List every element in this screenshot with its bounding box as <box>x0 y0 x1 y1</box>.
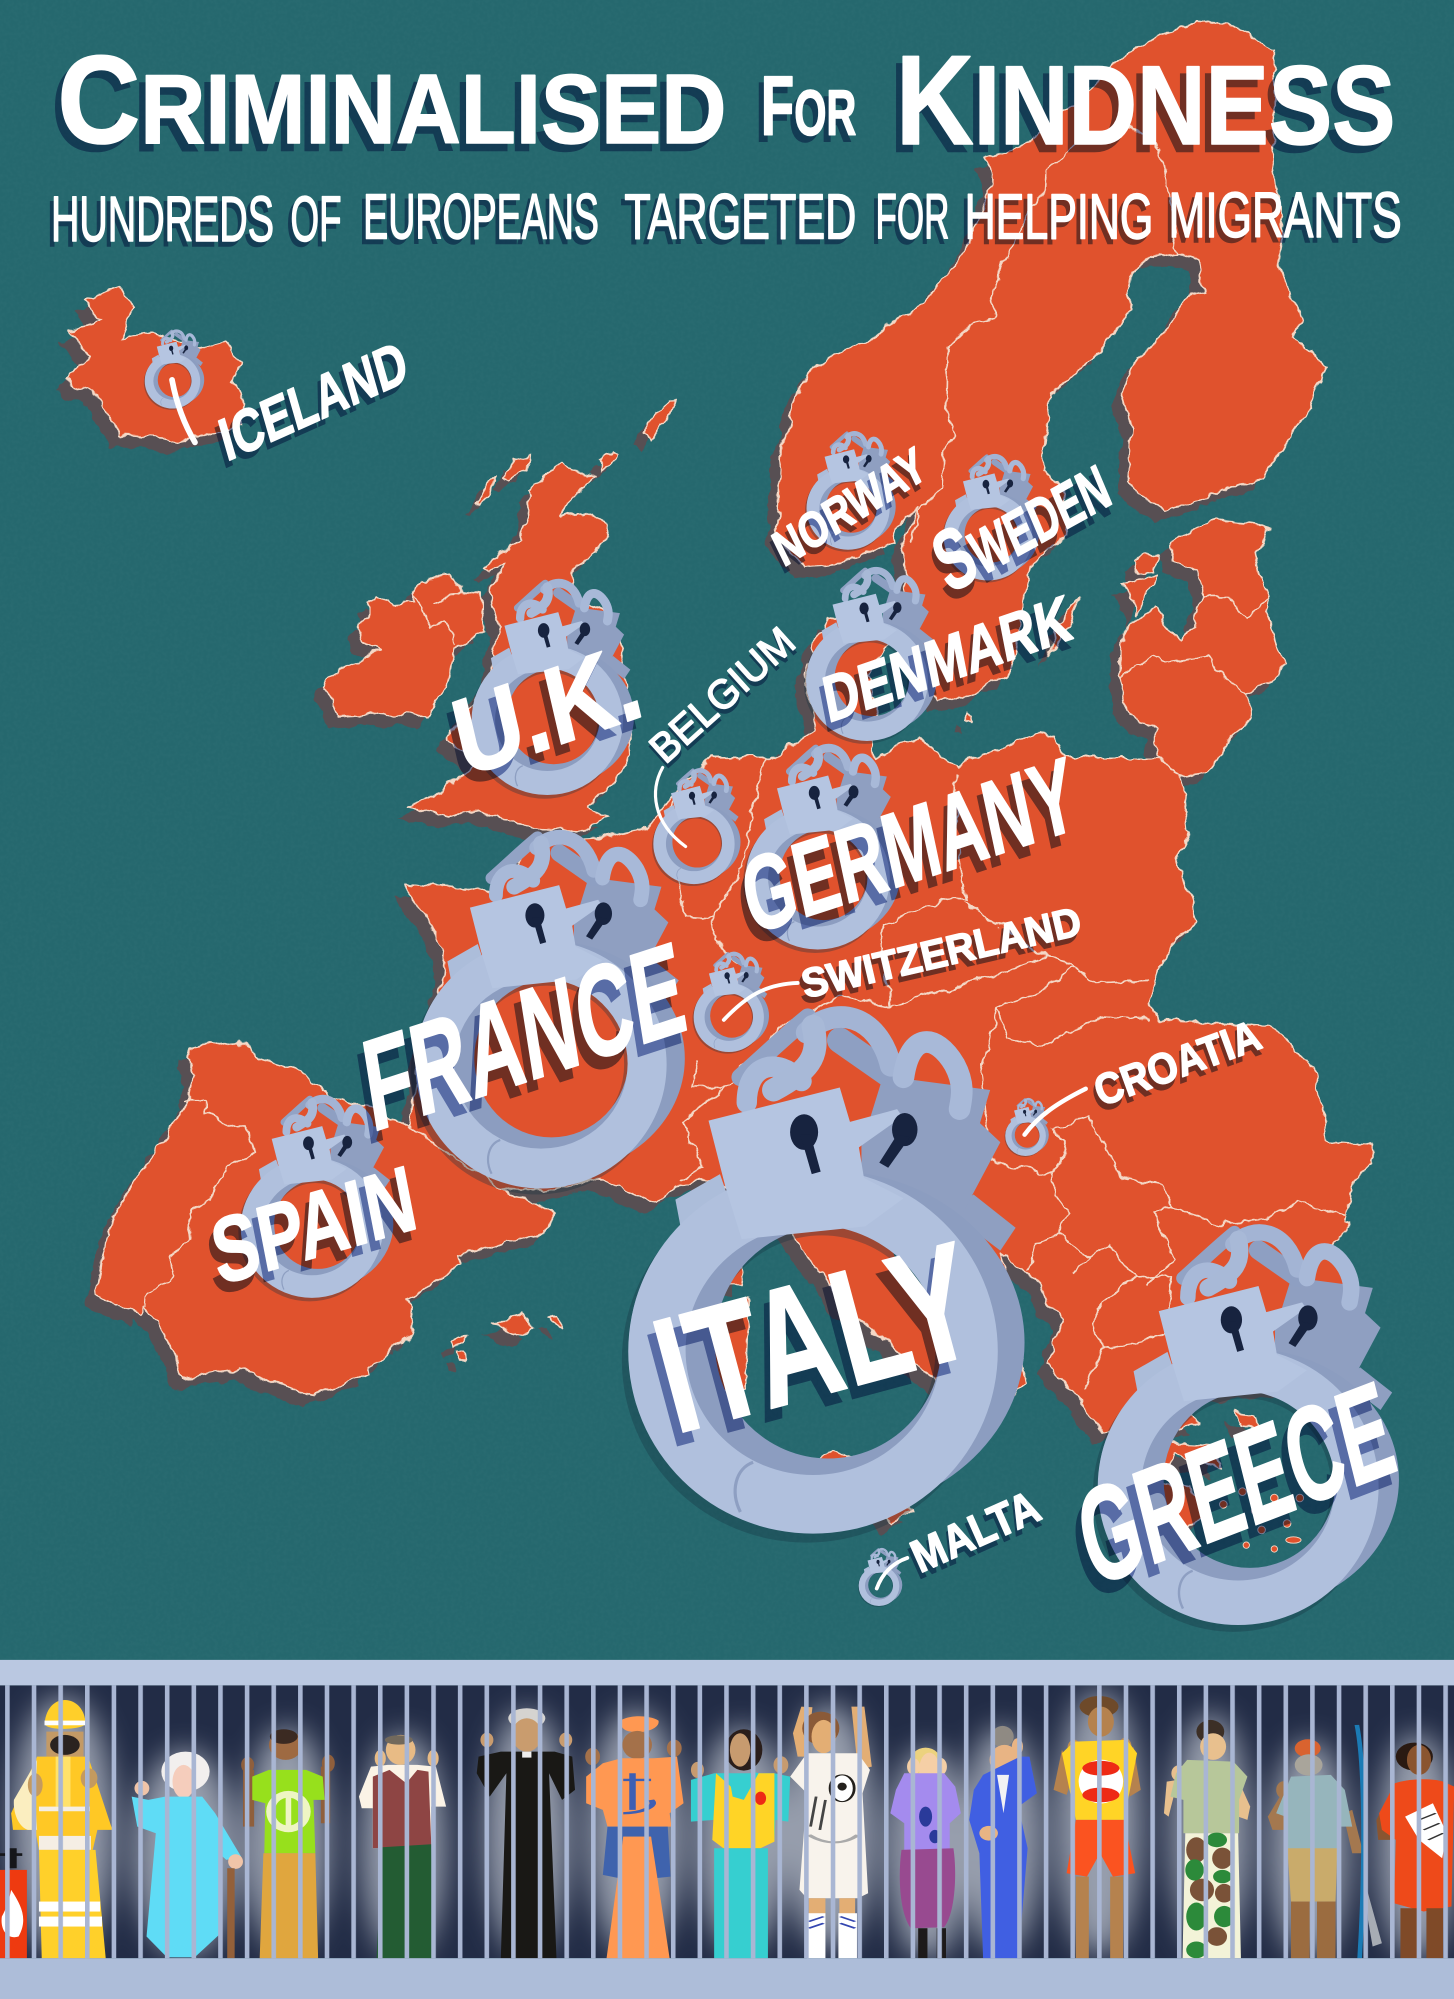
subtitle: OF <box>287 188 338 260</box>
prison frame: top rail <box>0 1660 1454 1685</box>
label: Italy: ITALY <box>637 1207 995 1469</box>
subtitle: EUROPEANS <box>363 180 599 252</box>
handcuff: Italy <box>622 1017 1025 1543</box>
label: Iceland: ICELAND <box>212 329 414 474</box>
title: CRIMINALISED <box>51 38 720 177</box>
label: Denmark: DENMARK <box>817 581 1077 737</box>
label: Germany: GERMANY <box>732 735 1086 957</box>
label: Norway: NORWAY <box>764 444 933 584</box>
person: lifeguard <box>1054 1696 1141 1958</box>
prison panel <box>0 1660 1454 1999</box>
label: Belgium: BELGIUM <box>641 623 804 776</box>
person: fire extinguisher <box>0 1848 27 1958</box>
handcuff: Malta <box>858 1549 902 1607</box>
subtitle: HUNDREDS <box>51 183 274 255</box>
prison interior <box>0 1685 1454 1958</box>
label: France <box>347 915 696 1172</box>
label: Switzerland: SWITZERLAND <box>797 898 1086 1007</box>
title: CRIMINALISED <box>57 31 726 170</box>
person: woman in purple <box>890 1748 961 1958</box>
label: Malta: MALTA <box>903 1480 1048 1582</box>
label: Germany: GERMANY <box>728 747 1082 969</box>
leader line: Croatia <box>1025 1089 1086 1135</box>
leader line: Iceland <box>172 380 195 442</box>
person: surfer with grey beard <box>1268 1725 1382 1958</box>
label: Croatia: CROATIA <box>1086 1018 1265 1122</box>
subtitle: FOR <box>875 180 949 252</box>
handcuff: Spain <box>238 1099 393 1301</box>
map: Adriatic wedge <box>887 1234 937 1303</box>
prison bars <box>0 1685 1454 1958</box>
handcuff: Sweden <box>942 456 1039 583</box>
leader line: Switzerland <box>724 983 798 1020</box>
title: FOR <box>756 65 851 160</box>
label: Sweden: SWEDEN <box>918 442 1120 620</box>
person: peace sign shirt <box>241 1729 335 1958</box>
handcuff: Croatia <box>1005 1099 1049 1157</box>
label: Italy: ITALY <box>631 1221 989 1482</box>
person: man in blue suit <box>969 1726 1037 1958</box>
label: Malta: MALTA <box>902 1486 1046 1589</box>
person: hi-vis woman <box>691 1729 790 1958</box>
person: footballer <box>790 1707 872 1958</box>
label: Spain: SPAIN <box>199 1157 419 1315</box>
label: U.K.: U.K. <box>437 631 647 812</box>
handcuff: Switzerland <box>692 954 769 1054</box>
person: waistcoat man <box>359 1735 446 1958</box>
subtitle: HELPING <box>965 180 1153 252</box>
person: camouflage trousers <box>1164 1720 1250 1958</box>
person: orange uniform <box>585 1716 684 1958</box>
label: Denmark: DENMARK <box>814 590 1073 746</box>
label: Norway: NORWAY <box>765 437 934 577</box>
map shadow <box>55 33 1362 1550</box>
label: Germany <box>726 735 1088 969</box>
handcuff: France <box>411 837 685 1195</box>
person: construction worker <box>11 1700 113 1958</box>
title <box>51 30 1395 180</box>
map: country borders <box>147 126 1346 1390</box>
label: Belgium: BELGIUM <box>640 618 804 772</box>
label: Switzerland: SWITZERLAND <box>794 904 1083 1013</box>
handcuff: Greece <box>1093 1232 1399 1632</box>
person: elderly woman <box>132 1752 243 1958</box>
label: Sweden: SWEDEN <box>920 432 1121 611</box>
handcuff: Norway <box>805 433 896 552</box>
subtitle <box>47 179 1402 260</box>
label: U.K.: U.K. <box>442 620 652 801</box>
subtitle: TARGETED <box>624 180 856 252</box>
handcuff: Iceland <box>144 331 204 410</box>
handcuff: Denmark <box>804 570 937 744</box>
subtitle: EUROPEANS <box>359 185 595 258</box>
person: woman in orange dress <box>1376 1743 1454 1958</box>
label: France: FRANCE <box>354 915 694 1160</box>
subtitle: HELPING <box>961 185 1149 258</box>
handcuff: Germany <box>743 748 900 953</box>
map: Greek islands <box>1214 1488 1304 1552</box>
title: FOR <box>761 59 856 153</box>
prison frame: bottom rail <box>0 1958 1454 1999</box>
label: Iceland: ICELAND <box>209 336 411 481</box>
subtitle: HUNDREDS <box>47 188 270 260</box>
person: priest <box>477 1708 575 1958</box>
label: France: FRANCE <box>348 927 688 1172</box>
map: Europe land and borders <box>65 22 1372 1539</box>
leader line: Belgium <box>656 767 686 847</box>
handcuff: U.K. <box>469 583 634 799</box>
figures behind bars <box>0 1690 1454 1960</box>
title: KINDNESS <box>889 38 1389 180</box>
subtitle: TARGETED <box>621 185 853 258</box>
leader line: Malta <box>877 1558 907 1588</box>
subtitle: OF <box>291 183 342 255</box>
glow behind figures <box>12 1690 1454 1960</box>
label: Croatia: CROATIA <box>1088 1012 1267 1116</box>
subtitle: FOR <box>872 185 946 258</box>
handcuff: Belgium <box>652 770 741 886</box>
label: Spain: SPAIN <box>204 1147 424 1305</box>
